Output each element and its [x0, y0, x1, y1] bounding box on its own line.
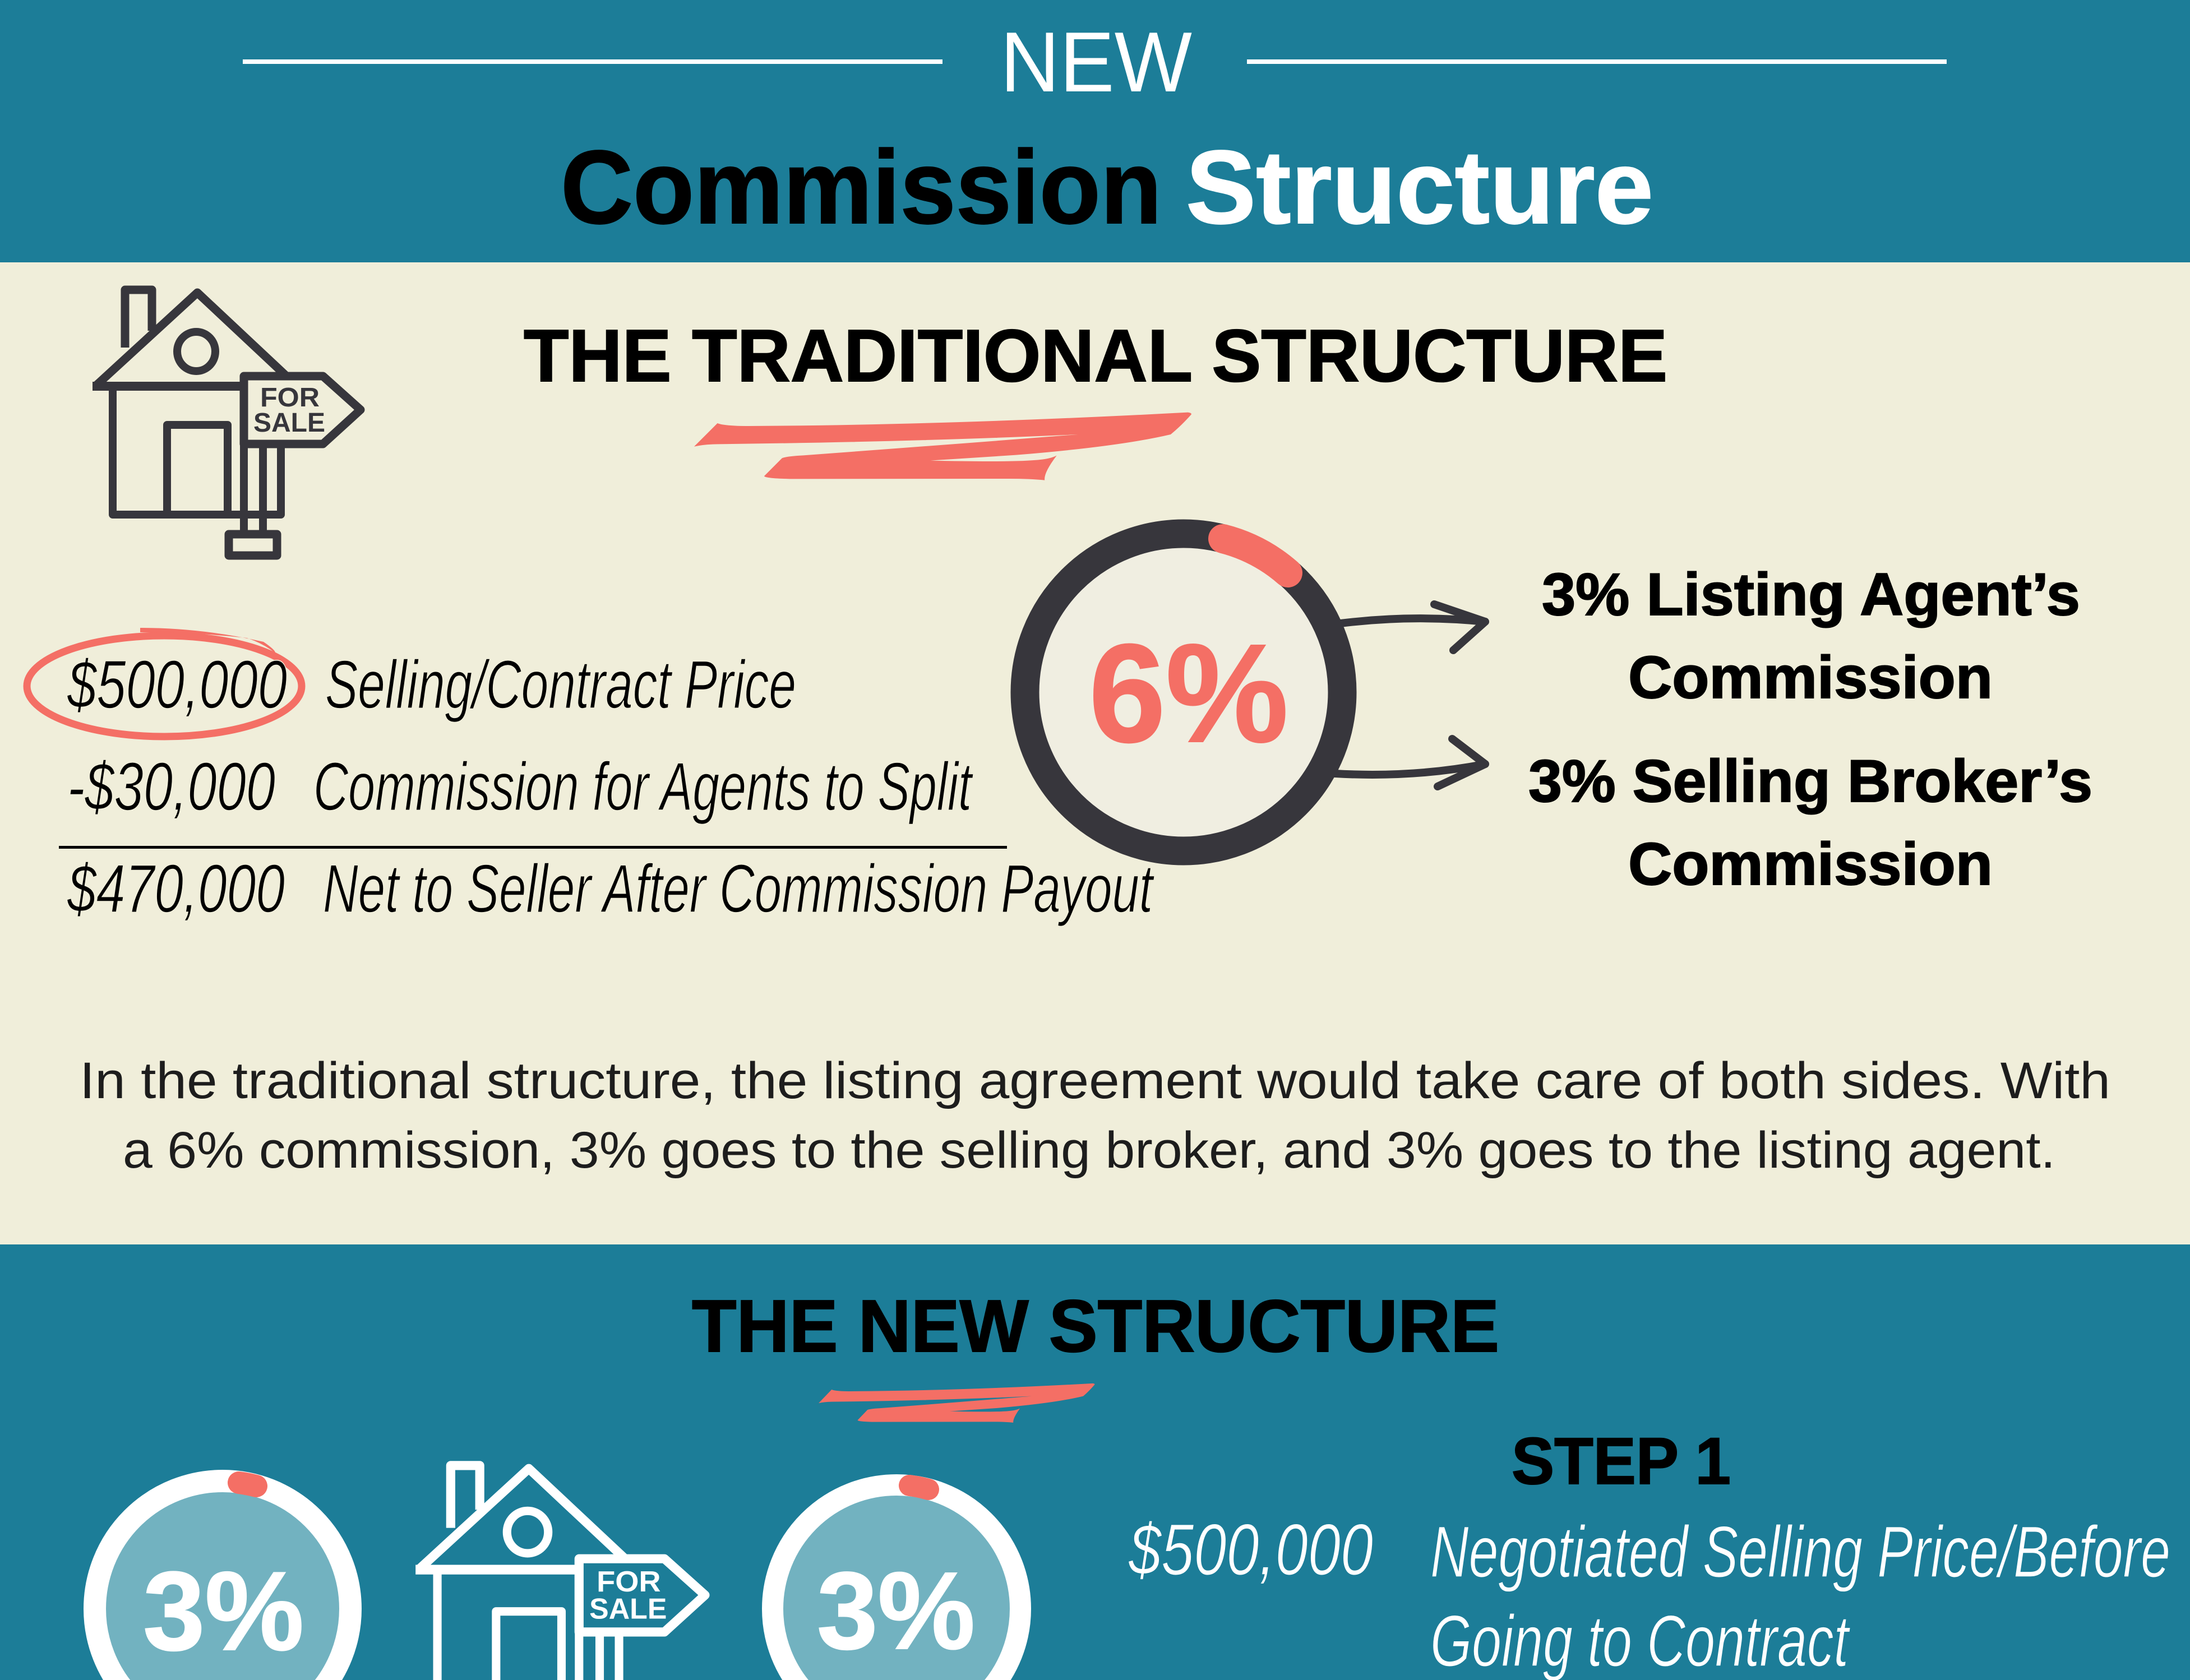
title: Commission Structure: [561, 129, 1653, 246]
row: commission: -$30,000: [67, 748, 275, 825]
text block: explanation: a 6% commission, 3% goes to the selling broker, and 3% goes to the listing agent.: [123, 1122, 2055, 1179]
figure: 3%: 3%: [817, 1549, 975, 1672]
text block: step 1 detail: [1128, 1508, 2170, 1680]
row: commission: [67, 748, 974, 825]
row: net to seller: Net to Seller After Commission Payout: [323, 850, 1155, 927]
heading: step 1: STEP 1: [1512, 1424, 1731, 1498]
labels: commission split: Commission: [1628, 830, 1993, 897]
figure: 3%: 3%: [143, 1549, 304, 1674]
labels: commission split: 3% Selling Broker’s: [1528, 747, 2092, 814]
icon: white house with for sale sign: SALE: [589, 1593, 667, 1625]
labels: commission split: [1528, 561, 2092, 897]
title: Commission Structure: Structure: [1186, 129, 1653, 246]
callout: red circle around selling price: [27, 628, 302, 737]
labels: commission split: 3% Listing Agent’s: [1542, 561, 2080, 628]
row: net to seller: $470,000: [67, 850, 285, 927]
row: selling price: $500,000: [67, 646, 287, 723]
text block: step 1 detail: Going to Contract: [1430, 1600, 1851, 1680]
heading: the new structure: THE NEW STRUCTURE: [692, 1285, 1499, 1367]
scribble underline: [694, 413, 1191, 480]
row: selling price: Selling/Contract Price: [325, 646, 796, 723]
text block: step 1 detail: $500,000: [1128, 1508, 1373, 1590]
text block: explanation: [80, 1052, 2110, 1179]
heading: the traditional structure: THE TRADITIONAL STRUCTURE: [524, 314, 1667, 397]
icon: white house with for sale sign: FOR: [597, 1565, 661, 1598]
panel: header band: [0, 0, 2190, 262]
title: Commission Structure: Commission: [561, 129, 1162, 246]
heading: NEW: NEW: [1000, 15, 1192, 110]
icon: white house with for sale sign: [415, 1465, 705, 1680]
figure: 6%: 6%: [1089, 615, 1288, 771]
arrows from donut: [1335, 604, 1485, 786]
chart: right 3% donut: [773, 1485, 1020, 1680]
icon: house with for sale sign: FOR: [260, 383, 320, 413]
row: net to seller: [67, 850, 1155, 927]
text block: explanation: In the traditional structure, the listing agreement would take care of both sides. With: [80, 1052, 2110, 1109]
labels: commission split: Commission: [1628, 644, 1993, 711]
panel: the new structure: [0, 1244, 2190, 1680]
panel: the traditional structure: [0, 262, 2190, 1244]
scribble underline: [819, 1383, 1094, 1423]
chart: left 3% donut: [95, 1481, 350, 1680]
row: commission: Commission for Agents to Split: [313, 748, 974, 825]
calculation: price breakdown: [27, 628, 1155, 927]
row: selling price: [67, 646, 796, 723]
icon: house with for sale sign: [93, 290, 361, 556]
chart: 6% donut: [1025, 534, 1342, 851]
icon: house with for sale sign: SALE: [253, 408, 325, 438]
